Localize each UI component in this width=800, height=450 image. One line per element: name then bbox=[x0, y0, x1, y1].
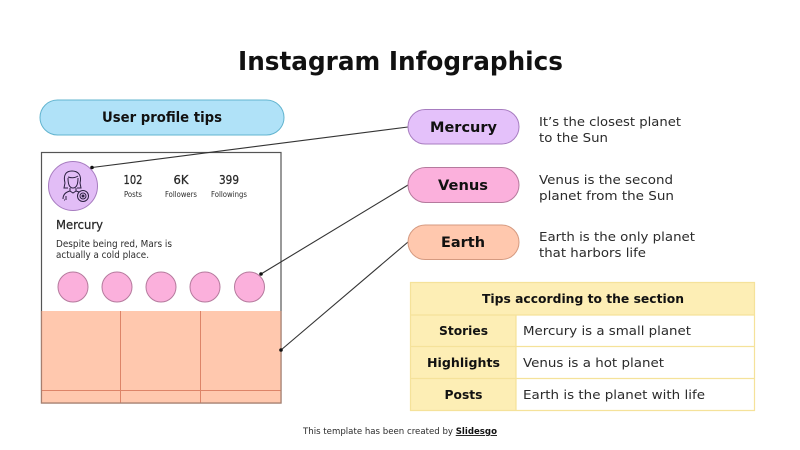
pill: Mercury bbox=[408, 110, 519, 144]
text: Mercury description: It’s the closest planet bbox=[539, 114, 681, 129]
pill: user profile tips: User profile tips bbox=[102, 110, 222, 126]
row: Stories: Stories bbox=[439, 323, 488, 338]
stat: followers bbox=[165, 173, 197, 199]
pill: Venus bbox=[408, 168, 519, 202]
row: Stories bbox=[439, 323, 691, 338]
text: Earth description: that harbors life bbox=[539, 245, 646, 260]
pill: Earth bbox=[408, 225, 519, 260]
stat: posts: Posts bbox=[124, 190, 142, 199]
title: Instagram Infographics bbox=[238, 47, 563, 77]
text: Venus description: planet from the Sun bbox=[539, 188, 674, 203]
icon: avatar bbox=[48, 162, 98, 210]
stat: followers: 6K bbox=[174, 173, 190, 187]
panel: profile mockup bbox=[42, 152, 281, 403]
connector: Earth to posts grid bbox=[279, 242, 408, 352]
profile name: Mercury bbox=[56, 218, 103, 232]
profile bio: actually a cold place. bbox=[56, 250, 149, 261]
row: Highlights: Highlights bbox=[427, 355, 500, 370]
pill: Earth: Earth bbox=[441, 235, 485, 251]
stat: followings bbox=[211, 173, 247, 199]
text: Venus description: Venus is the second bbox=[539, 172, 673, 187]
profile bio: Despite being red, Mars is bbox=[56, 239, 172, 250]
stat: posts bbox=[124, 173, 142, 199]
row: Highlights bbox=[427, 355, 664, 370]
text: Mercury description bbox=[539, 114, 681, 145]
connector: Mercury to avatar bbox=[90, 127, 408, 169]
pill: user profile tips bbox=[40, 100, 284, 135]
row: Posts bbox=[444, 387, 705, 402]
profile bio bbox=[56, 239, 172, 261]
pill: Venus: Venus bbox=[438, 178, 488, 194]
text: Venus description bbox=[539, 172, 674, 203]
posts grid bbox=[42, 311, 281, 403]
row: Posts: Posts bbox=[444, 387, 482, 402]
text: Mercury description: to the Sun bbox=[539, 130, 608, 145]
row: Posts: Earth is the planet with life bbox=[523, 387, 705, 402]
text: Earth description: Earth is the only planet bbox=[539, 229, 695, 244]
table: tips according to the section bbox=[410, 282, 754, 410]
stat: followings: Followings bbox=[211, 190, 247, 199]
row: Highlights: Venus is a hot planet bbox=[523, 355, 664, 370]
connector: Venus to story circles bbox=[259, 185, 408, 276]
stat: followings: 399 bbox=[219, 173, 239, 187]
text: Earth description bbox=[539, 229, 695, 260]
stat: followers: Followers bbox=[165, 190, 197, 199]
row: Stories: Mercury is a small planet bbox=[523, 323, 691, 338]
table header: Tips according to the section bbox=[482, 291, 684, 306]
footer credit: This template has been created by Slidesgo bbox=[302, 427, 497, 437]
story highlight circles bbox=[58, 272, 264, 302]
stat: posts: 102 bbox=[124, 173, 142, 187]
pill: Mercury: Mercury bbox=[430, 120, 498, 136]
